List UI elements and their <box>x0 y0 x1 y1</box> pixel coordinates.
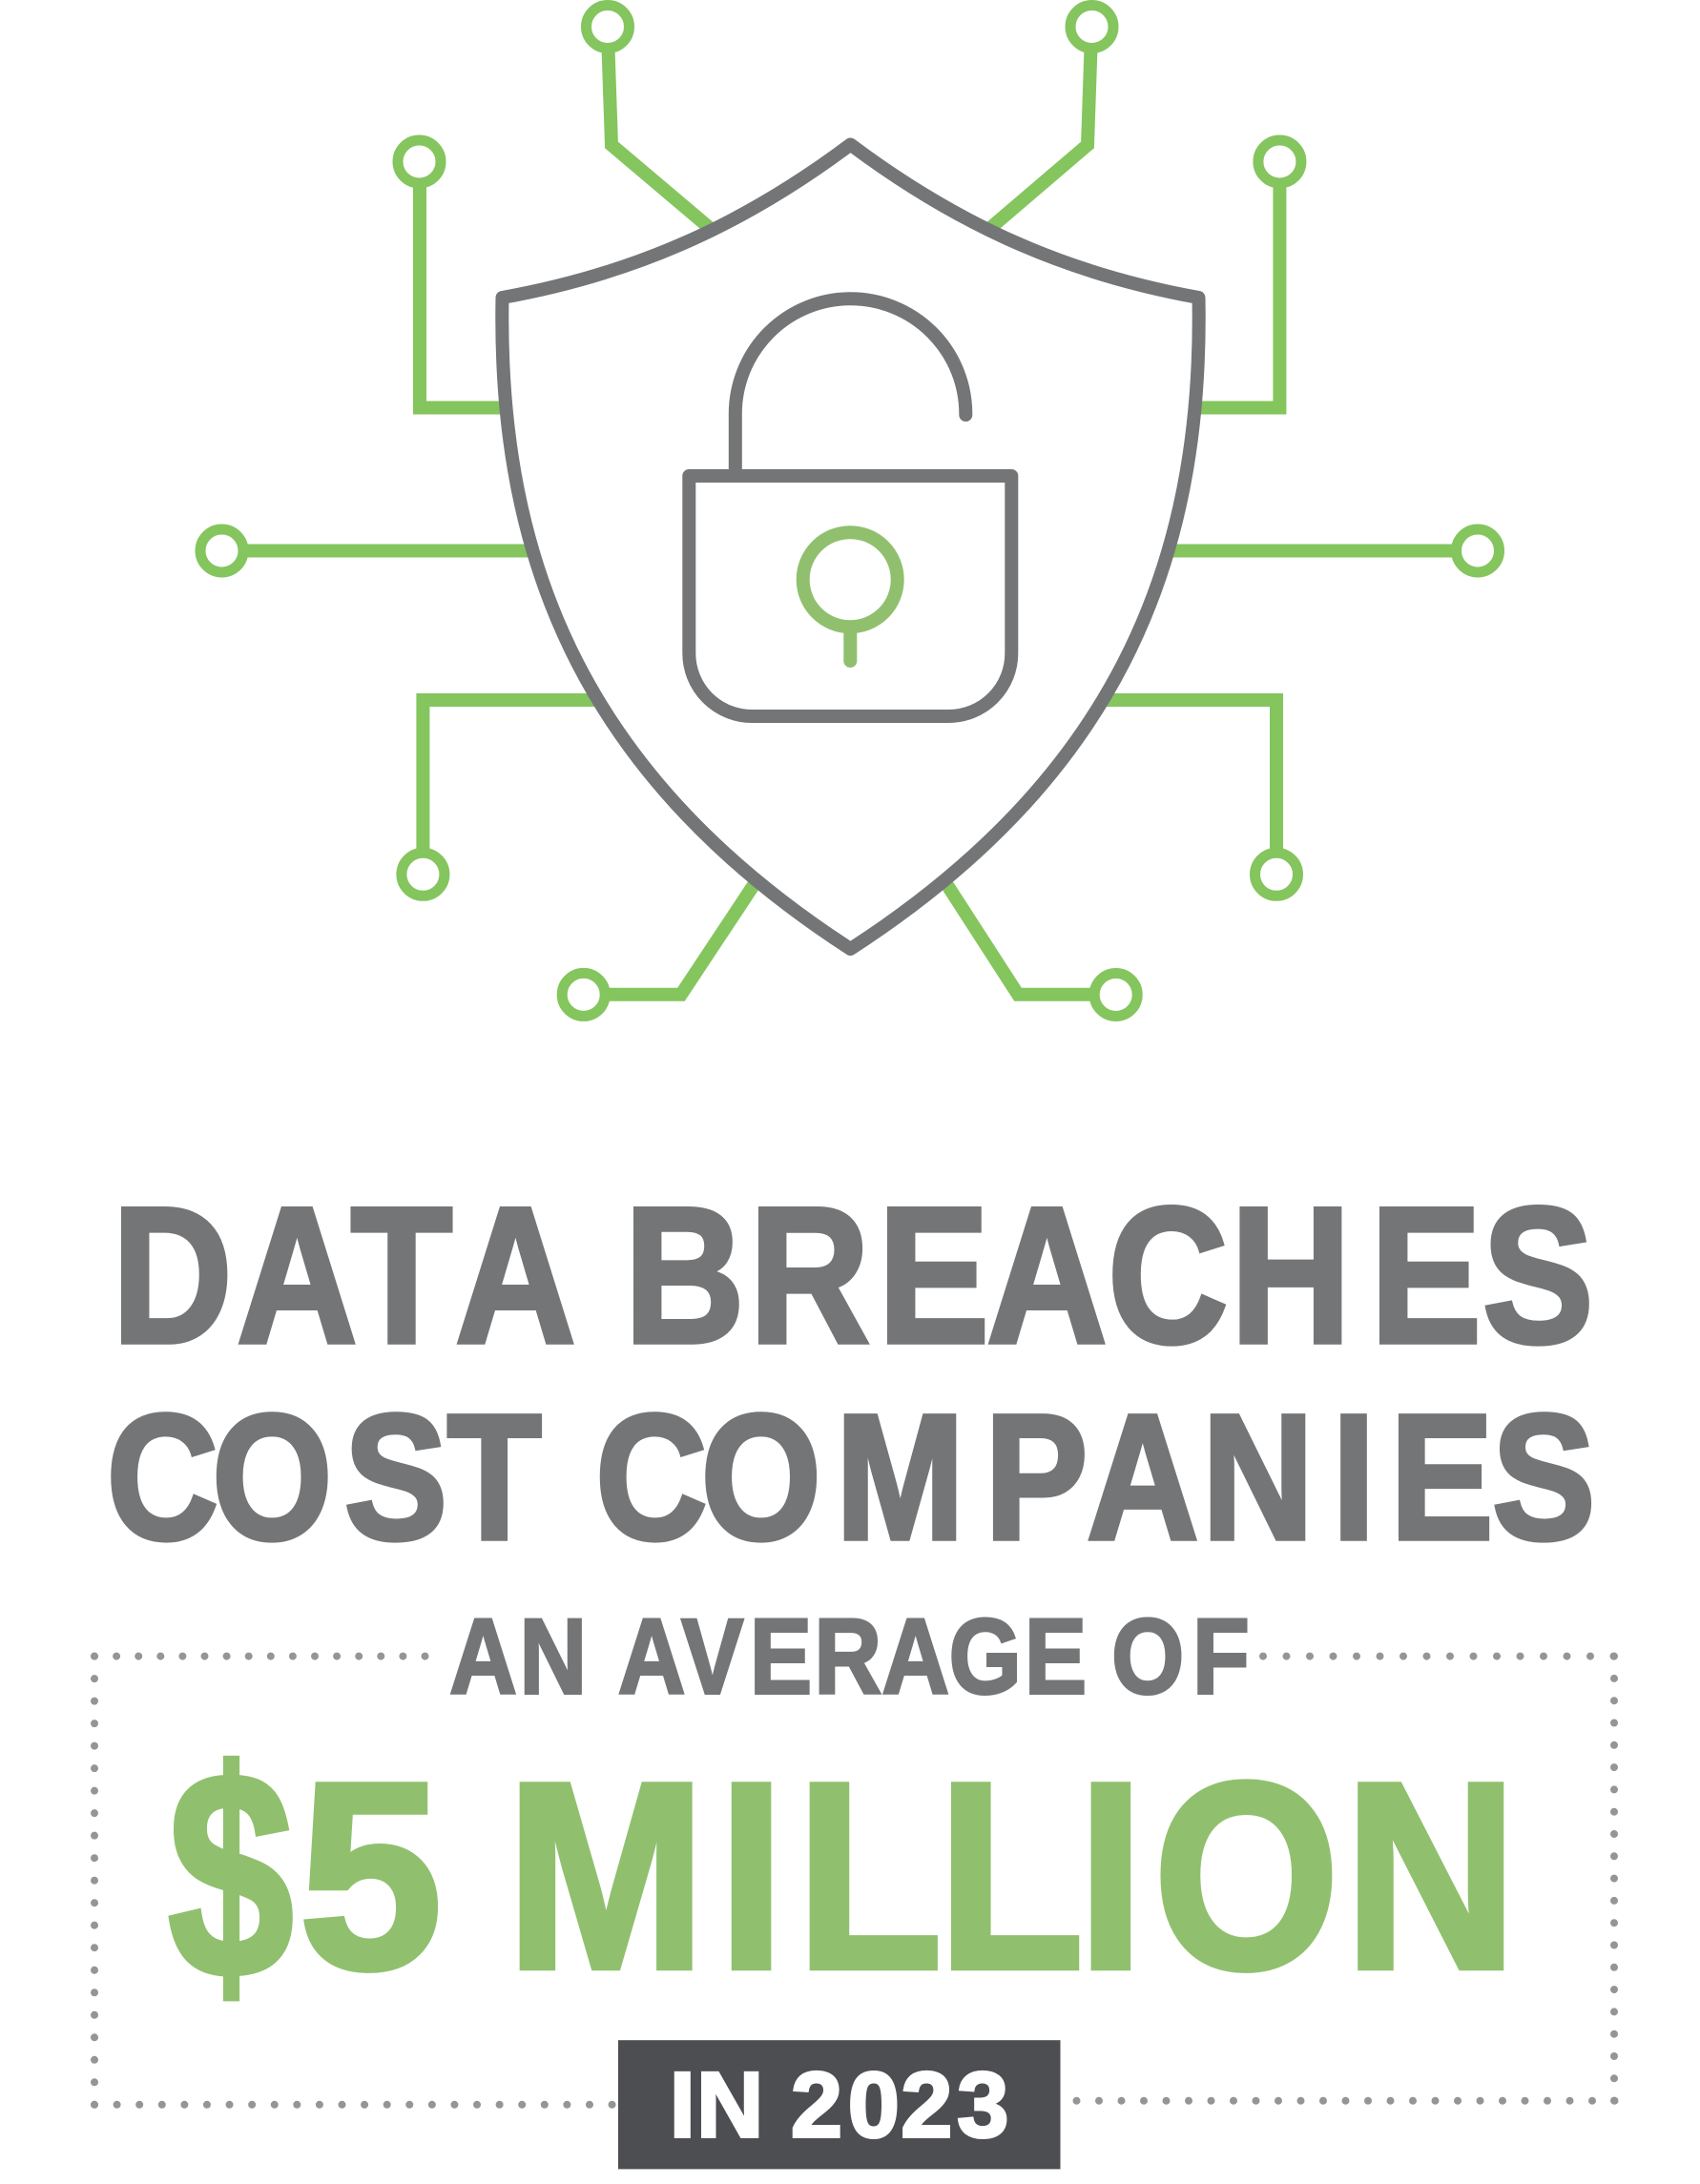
trace: top left <box>586 6 711 229</box>
padlock keyhole <box>803 532 898 661</box>
key figure: $5 million: MILLION <box>507 1728 1517 2025</box>
trace: lower right <box>1092 700 1297 896</box>
padlock body <box>689 476 1011 716</box>
trace: bottom right <box>945 882 1137 1017</box>
trace: middle left <box>200 529 539 572</box>
icon: open padlock <box>689 299 1011 716</box>
padlock shackle <box>736 299 965 476</box>
trace: upper left <box>398 140 510 408</box>
year badge: in 2023: IN 2023 <box>670 2052 1008 2157</box>
subheading: an average of: AN AVERAGE OF <box>449 1597 1250 1717</box>
key figure: $5 million: $ <box>168 1712 294 2040</box>
icon: circuit traces and nodes around shield <box>200 6 1500 1017</box>
trace: bottom left <box>562 882 756 1016</box>
heading: cost companies: COST COMPANIES <box>107 1378 1595 1577</box>
dotted frame <box>93 1657 1615 2106</box>
year badge: in 2023 <box>618 2040 1061 2169</box>
key figure: $5 million: 5 <box>299 1727 443 2025</box>
trace: lower left <box>402 700 611 896</box>
trace: upper right <box>1188 140 1301 408</box>
trace: middle right <box>1159 529 1500 572</box>
key figure: $5 million <box>168 1712 1517 2040</box>
heading: data breaches: DATA BREACHES <box>112 1168 1593 1384</box>
icon: shield outline <box>502 145 1199 949</box>
trace: top right <box>989 6 1113 229</box>
